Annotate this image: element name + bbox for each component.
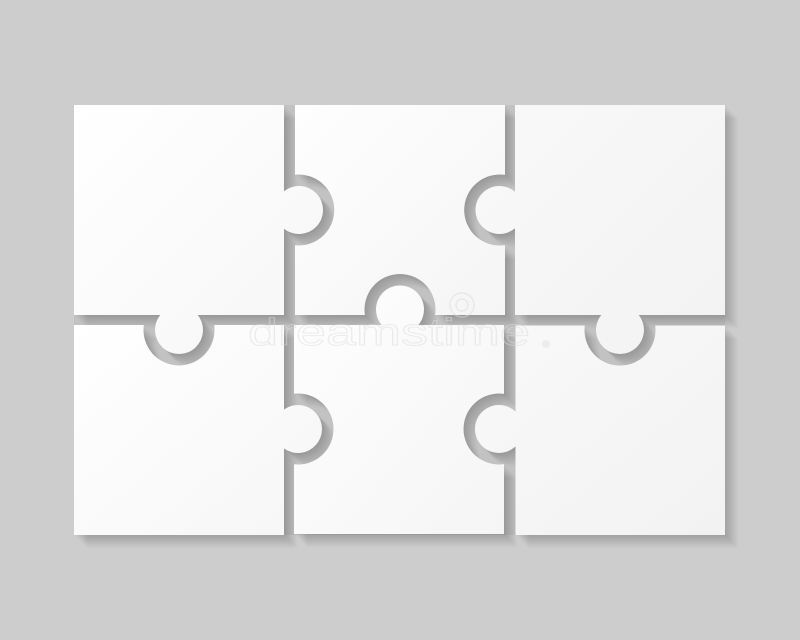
watermark <box>248 293 550 354</box>
puzzle piece: top right <box>475 105 725 354</box>
puzzle piece: bottom middle <box>294 285 504 534</box>
watermark: dreamstime <box>248 312 530 354</box>
puzzle piece: top middle <box>295 105 505 315</box>
puzzle piece: bottom right <box>475 326 725 535</box>
gap base <box>74 105 725 535</box>
long shadow <box>75 106 738 548</box>
puzzle piece: bottom left <box>74 325 322 535</box>
puzzle piece: top left <box>74 105 323 354</box>
